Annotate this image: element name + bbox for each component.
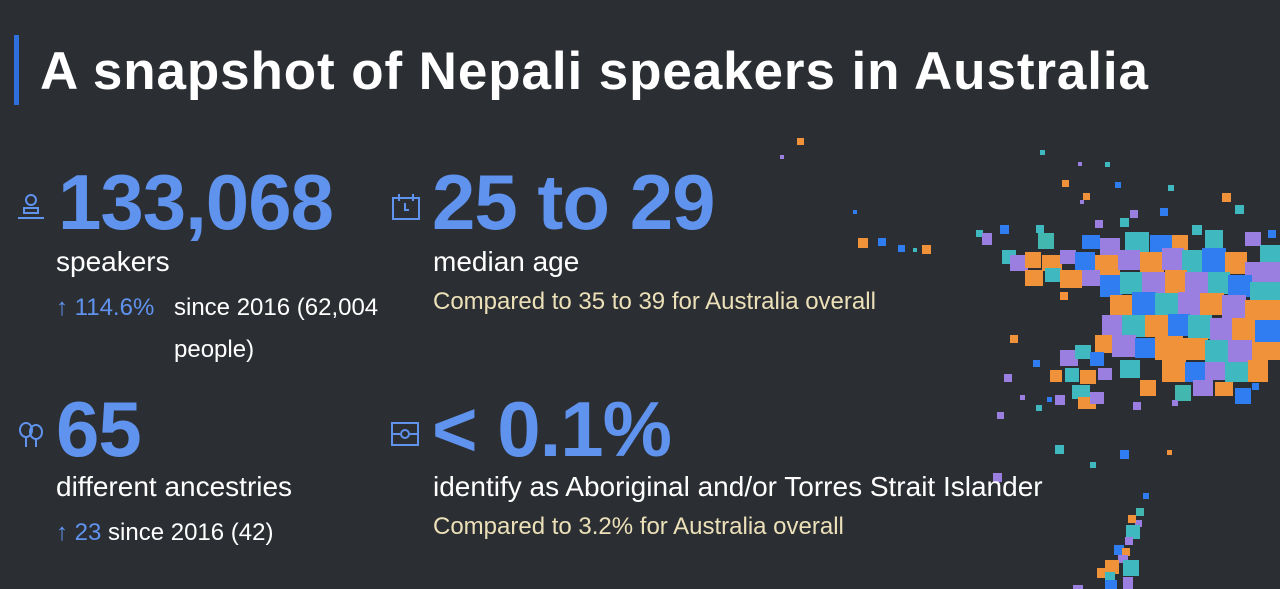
panel: indigenous — [391, 385, 1043, 540]
panel: speakers: ↑ 114.6% — [56, 294, 154, 321]
panel: ancestries — [19, 385, 292, 546]
panel: median age: Compared to 35 to 39 for Australia overall — [433, 288, 876, 315]
panel: ancestries: different ancestries — [56, 471, 292, 502]
panel: indigenous: identify as Aboriginal and/or Torres Strait Islander — [433, 471, 1043, 502]
title: A snapshot of Nepali speakers in Australia — [40, 42, 1149, 101]
panel: median age: 25 to 29 — [432, 158, 714, 246]
panel: median age — [392, 158, 876, 315]
panel: speakers: 133,068 — [58, 158, 333, 246]
icon: flag box — [391, 422, 419, 446]
panel: ancestries: ↑ 23 since 2016 (42) — [56, 519, 273, 546]
icon: balloons — [19, 422, 43, 447]
panel: ancestries: 65 — [56, 385, 141, 473]
panel: speakers: speakers — [56, 246, 170, 277]
panel: speakers — [18, 158, 378, 363]
panel: indigenous: Compared to 3.2% for Australia overall — [433, 513, 844, 540]
panel: speakers: since 2016 (62,004 people) — [174, 294, 378, 363]
icon: person — [18, 194, 44, 219]
icon: calendar — [392, 194, 420, 220]
panel: indigenous: < 0.1% — [432, 385, 671, 473]
panel: median age: median age — [433, 246, 579, 277]
